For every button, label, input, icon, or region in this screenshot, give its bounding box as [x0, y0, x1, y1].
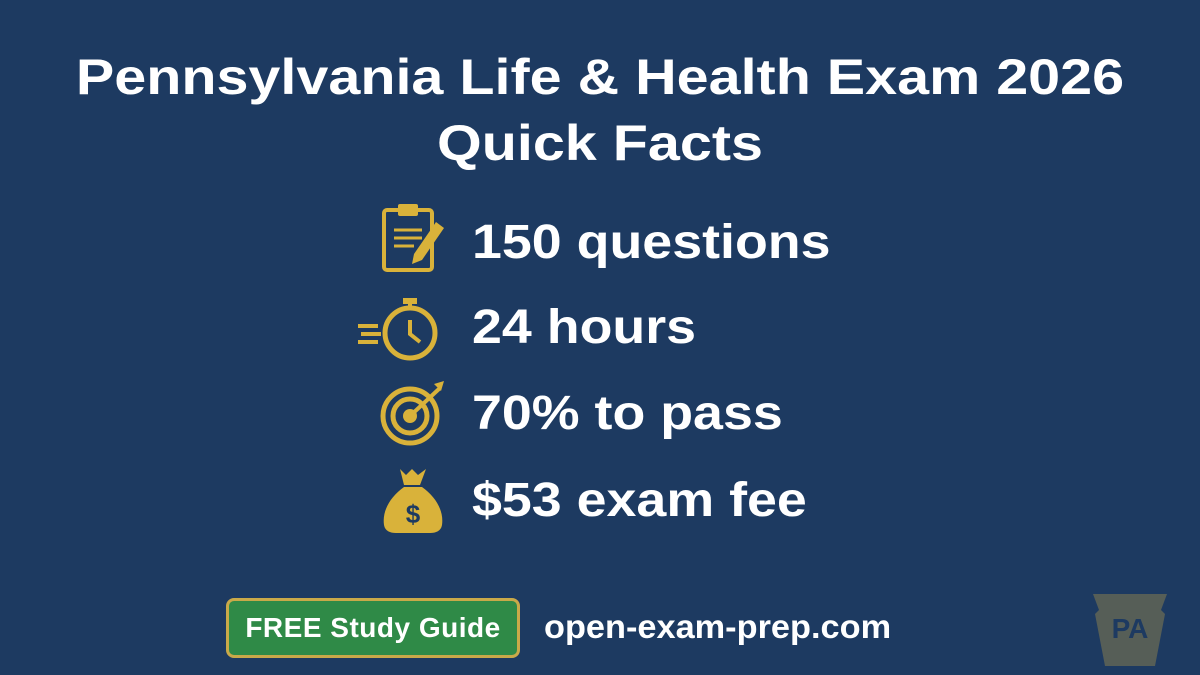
text: fee: $53 exam fee	[472, 474, 807, 527]
url: open-exam-prep.com	[544, 608, 891, 645]
title: Quick Facts	[437, 115, 763, 171]
icon: PA keystone: PA	[1112, 613, 1148, 644]
icon: clipboard	[382, 204, 444, 272]
text: questions: 150 questions	[472, 216, 831, 269]
icon: money bag: $	[406, 499, 421, 529]
icon: PA keystone	[1093, 594, 1167, 666]
text: pass: 70% to pass	[472, 387, 783, 440]
title	[76, 49, 1124, 171]
text: hours: 24 hours	[472, 301, 696, 354]
badge: free study guide	[226, 598, 520, 658]
badge: free study guide: FREE Study Guide	[245, 612, 501, 643]
icon: money bag	[384, 469, 442, 533]
icon: stopwatch	[358, 298, 438, 360]
icon: target	[380, 381, 444, 446]
title: Pennsylvania Life & Health Exam 2026	[76, 49, 1124, 105]
